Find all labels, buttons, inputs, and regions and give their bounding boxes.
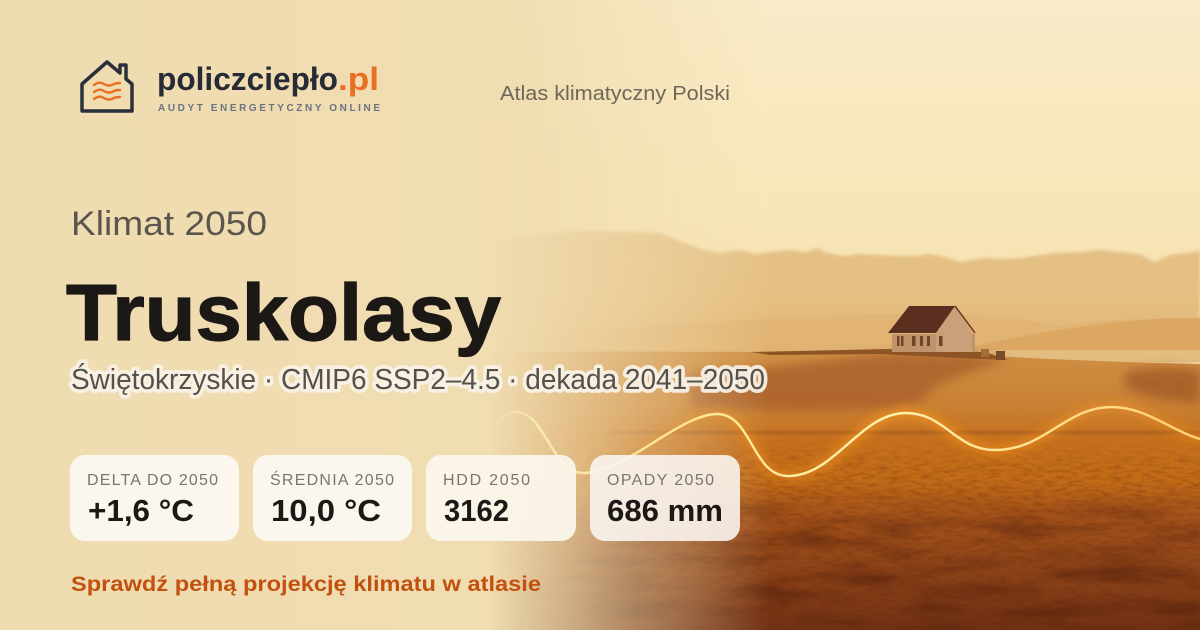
misty hills <box>440 314 1200 362</box>
field <box>440 352 1200 630</box>
eyebrow: Klimat 2050 <box>71 205 267 243</box>
logo domain: .pl <box>338 61 379 97</box>
stat card: rainfall <box>590 455 740 541</box>
title: Truskolasy <box>66 268 502 357</box>
house roof <box>888 306 955 333</box>
value: 3162 <box>444 493 509 528</box>
value: 10,0 °C <box>271 493 381 528</box>
hedge under house <box>750 349 1008 360</box>
dark wheat streaks <box>590 502 1200 630</box>
house wall <box>892 334 975 352</box>
ridge shadow line <box>610 431 1200 434</box>
shed <box>981 349 989 357</box>
logo <box>82 61 380 114</box>
right dune shadow <box>1125 367 1200 403</box>
label: DELTA DO 2050 <box>87 472 218 489</box>
dune shadow under house <box>690 353 1010 410</box>
value: 686 mm <box>607 493 723 528</box>
house gable <box>936 306 972 352</box>
label: ŚREDNIA 2050 <box>270 470 394 489</box>
logo tagline: AUDYT ENERGETYCZNY ONLINE <box>158 103 380 114</box>
stat card: average <box>253 455 412 541</box>
stat card: delta <box>70 455 239 541</box>
icon: house <box>888 306 1005 360</box>
value: +1,6 °C <box>88 493 194 528</box>
right hill <box>975 318 1200 350</box>
sky <box>592 0 1200 199</box>
glowing wave line <box>490 407 1200 476</box>
subtitle with halo: Świętokrzyskie · CMIP6 SSP2–4.5 · dekada 2041–2050 <box>71 362 765 396</box>
landscape photo scene <box>502 0 1200 630</box>
icon: house with heat waves <box>82 62 132 111</box>
distant tree line <box>536 230 1200 364</box>
subtitle with halo: Świętokrzyskie · CMIP6 SSP2–4.5 · dekada 2041–2050 <box>71 362 765 396</box>
field grain texture <box>582 448 1200 595</box>
call to action: Sprawdź pełną projekcję klimatu w atlasie <box>71 573 541 596</box>
pale horizon strip <box>1000 350 1200 362</box>
logo wordmark: policzciepło <box>157 61 338 97</box>
header label: Atlas klimatyczny Polski <box>500 83 730 105</box>
label: HDD 2050 <box>443 472 530 489</box>
stat card: HDD <box>426 455 576 541</box>
label: OPADY 2050 <box>607 472 714 489</box>
house windows <box>897 336 942 346</box>
